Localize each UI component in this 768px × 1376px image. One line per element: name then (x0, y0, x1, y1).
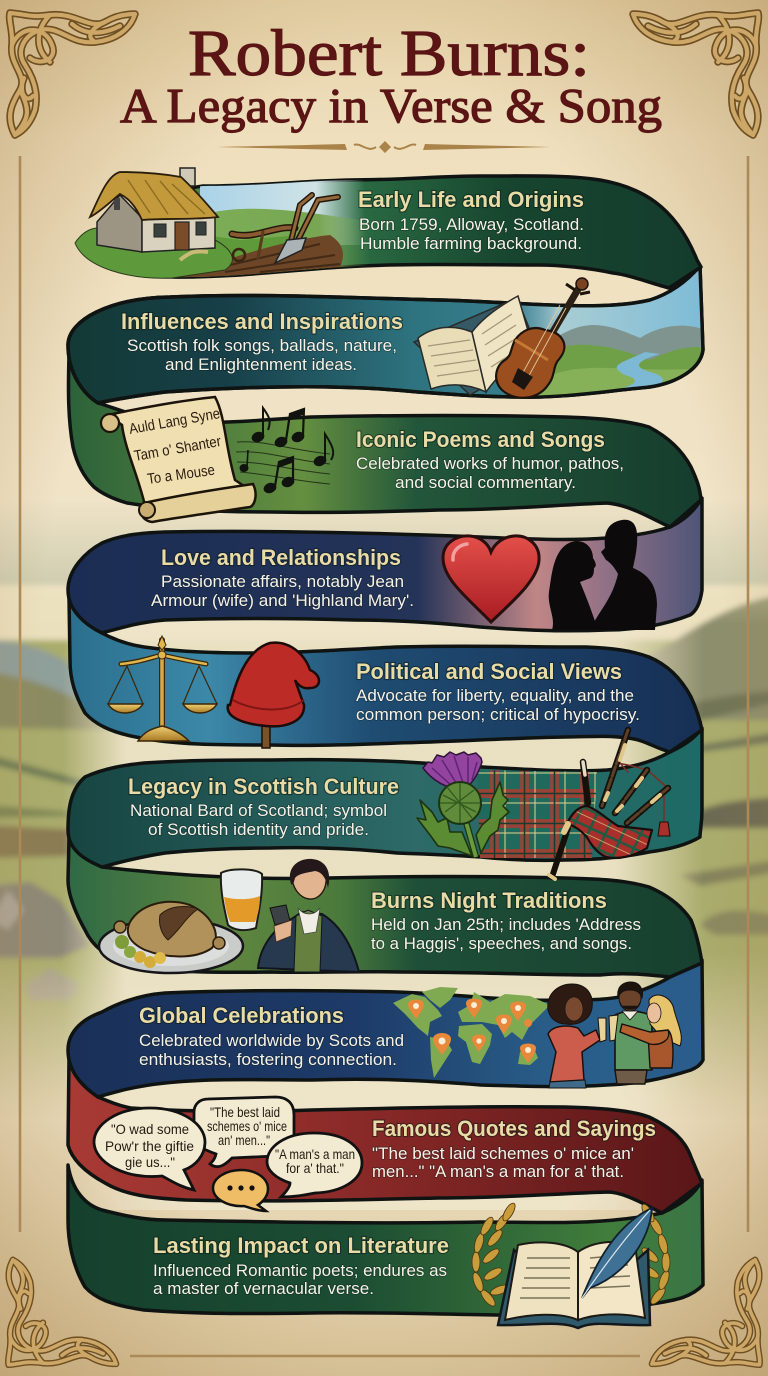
body text: and social commentary. (395, 474, 576, 492)
icon: whisky glass (221, 869, 262, 930)
body text: enthusiasts, fostering connection. (139, 1051, 397, 1069)
ribbon: love and relationships (navy to rose) (68, 498, 702, 633)
corner: top right celtic knot (633, 13, 758, 135)
icon: bagpipes (549, 730, 670, 879)
icon: laurel wreath (471, 1201, 671, 1308)
panel 7: burns night traditions (99, 859, 641, 973)
speech bubble: the best laid schemes: schemes o' mice (207, 1118, 287, 1134)
speech bubble: the best laid schemes: "The best laid (210, 1104, 280, 1120)
ribbon: lasting impact (green) (68, 1165, 703, 1315)
ribbon: burns night (green) (68, 838, 702, 977)
corner: bottom left celtic knot (8, 1260, 116, 1365)
ribbon: famous quotes (red) (68, 1058, 702, 1213)
heading: Legacy in Scottish Culture (128, 774, 399, 799)
heading: Global Celebrations (139, 1003, 344, 1028)
body text: Scottish folk songs, ballads, nature, (127, 337, 397, 355)
icon: parchment scroll: To a Mouse (146, 462, 216, 488)
body text: Armour (wife) and 'Highland Mary'. (151, 592, 414, 610)
corner: top left celtic knot (10, 13, 135, 135)
body text (356, 455, 624, 492)
panel 2: influences and inspirations (121, 278, 590, 398)
icon: red heart (443, 536, 539, 622)
icon: wooden plough (232, 195, 338, 263)
speech bubble: yellow ellipsis (213, 1170, 268, 1211)
body text (139, 1032, 404, 1069)
body text: Passionate affairs, notably Jean (161, 573, 404, 591)
body text (356, 687, 640, 724)
speech bubble: o wad some power: "O wad some (111, 1121, 189, 1137)
icon: thatched cottage and green island (75, 168, 232, 278)
heading: Burns Night Traditions (371, 888, 607, 913)
icon: violin (496, 278, 590, 398)
ribbon: iconic poems and songs (green) (68, 356, 701, 527)
heading: Love and Relationships (161, 545, 401, 570)
panel 8: global celebrations (139, 982, 681, 1088)
icon: golden scales of justice (108, 636, 217, 741)
body text: Celebrated worldwide by Scots and (139, 1032, 404, 1050)
icon: open book with quill (498, 1208, 652, 1328)
heading: Iconic Poems and Songs (356, 427, 605, 452)
icon: three friends toasting (548, 982, 681, 1088)
body text: a master of vernacular verse. (153, 1280, 374, 1298)
heading: Early Life and Origins (358, 187, 584, 212)
body text: Celebrated works of humor, pathos, (356, 455, 624, 473)
icon: couple silhouette (549, 520, 657, 630)
icon: portrait of robert burns (258, 859, 359, 972)
panel 6: legacy in scottish culture (128, 730, 670, 879)
panel 9: famous quotes and sayings (94, 1097, 656, 1211)
body text: Held on Jan 25th; includes 'Address (371, 916, 641, 934)
body text: to a Haggis', speeches, and songs. (371, 935, 632, 953)
speech bubble: the best laid schemes (194, 1097, 294, 1167)
heading: Influences and Inspirations (121, 309, 403, 334)
body text: and Enlightenment ideas. (165, 356, 357, 374)
icon: parchment scroll (101, 397, 256, 522)
ribbon: legacy in scottish culture (teal) (68, 728, 702, 867)
body text: Advocate for liberty, equality, and the (356, 687, 634, 705)
title: A Legacy in Verse & Song (120, 78, 662, 133)
body text: Born 1759, Alloway, Scotland. (359, 216, 584, 234)
panel 1: early life and origins (75, 168, 584, 278)
panel 10: lasting impact on literature (153, 1201, 671, 1328)
title flourish divider (217, 141, 551, 153)
icon: tartan cloth (477, 770, 597, 858)
panel 5: political and social views (108, 636, 640, 748)
ribbon: global celebrations (navy) (68, 960, 703, 1097)
body text (151, 573, 414, 610)
body text (359, 216, 584, 253)
icon: thistle (417, 752, 509, 857)
body text (372, 1145, 634, 1181)
body text: National Bard of Scotland; symbol (130, 802, 387, 820)
ribbon: influences and inspirations (teal with landscape) (66, 268, 705, 405)
body text: Humble farming background. (360, 235, 582, 253)
body text: of Scottish identity and pride. (148, 821, 369, 839)
speech bubble: o wad some power (94, 1108, 205, 1190)
icon: world map with pins (393, 987, 550, 1078)
icon: parchment scroll: Tam o' Shanter (133, 433, 222, 465)
icon: music notes (236, 408, 333, 494)
body text: common person; critical of hypocrisy. (356, 706, 640, 724)
title (120, 17, 662, 133)
speech bubble: a man's a man (267, 1133, 362, 1197)
ribbon: political and social views (blue) (69, 598, 702, 752)
speech bubble: o wad some power: Pow'r the giftie (105, 1138, 194, 1154)
speech bubble: o wad some power: gie us..." (125, 1154, 175, 1170)
speech bubble: a man's a man: for a' that." (286, 1160, 344, 1176)
body text: men..." "A man's a man for a' that. (372, 1163, 624, 1181)
heading: Lasting Impact on Literature (153, 1233, 449, 1258)
speech bubble: the best laid schemes: an' men..." (218, 1132, 270, 1148)
body text (127, 337, 397, 374)
ribbon: early life and origins (green with landscape) (100, 175, 701, 288)
panel 4: love and relationships (151, 520, 657, 630)
body text (153, 1262, 447, 1298)
icon: red liberty cap on pole (228, 643, 319, 748)
icon: open book (414, 296, 540, 395)
icon: parchment scroll: Auld Lang Syne (128, 405, 221, 438)
corner: bottom right celtic knot (652, 1260, 760, 1365)
body text (371, 916, 641, 953)
heading: Famous Quotes and Sayings (372, 1116, 656, 1141)
body text: "The best laid schemes o' mice an' (372, 1145, 634, 1163)
speech bubble: a man's a man: "A man's a man (275, 1146, 355, 1162)
title: Robert Burns: (188, 17, 590, 90)
body text (130, 802, 387, 839)
body text: Influenced Romantic poets; endures as (153, 1262, 447, 1280)
icon: haggis on plate (99, 902, 243, 973)
panel 3: iconic poems and songs (101, 397, 624, 522)
heading: Political and Social Views (356, 659, 622, 684)
